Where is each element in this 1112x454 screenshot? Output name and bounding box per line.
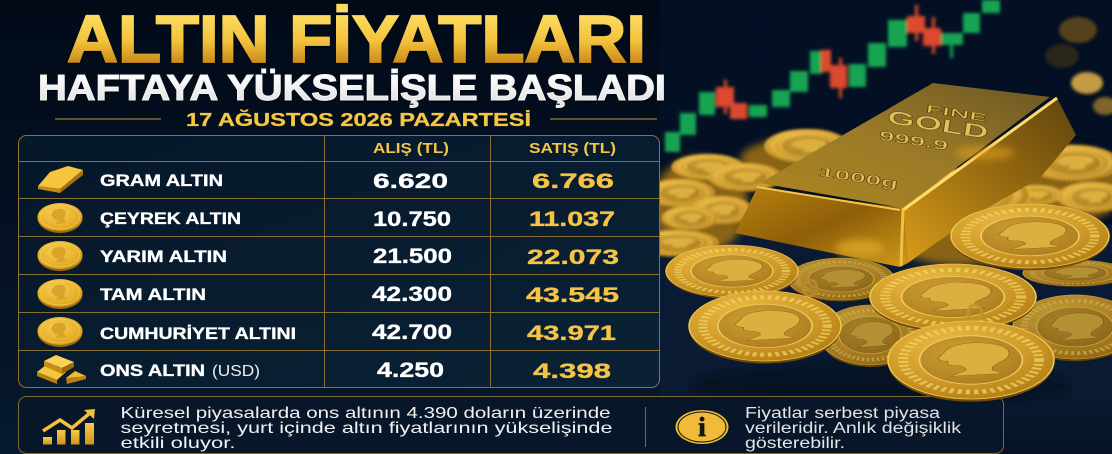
darker loose coins [788, 258, 1112, 367]
row: ons altın: (USD) [212, 363, 260, 380]
icon: front coin [888, 321, 1054, 402]
photo: gold bar and coins with rising chart [634, 0, 1112, 454]
bar engraving: 999.9 [878, 128, 949, 153]
row: cumhuriyet altını [38, 317, 616, 347]
text: market note [120, 405, 613, 452]
table header: SATIŞ (TL) [529, 140, 616, 157]
text: market note: Küresel piyasalarda ons altının 4.390 doların üzerinde [120, 405, 611, 422]
icon: gold bars stack [37, 355, 86, 384]
row: tam altın [38, 279, 619, 309]
row: çeyrek altın: 10.750 [373, 208, 451, 231]
table header [373, 140, 616, 157]
row: çeyrek altın [38, 203, 615, 233]
text: disclaimer [745, 405, 961, 452]
price table [18, 136, 660, 388]
icon: coin [38, 317, 82, 347]
golden mass under coins [652, 138, 1112, 265]
table header: ALIŞ (TL) [373, 140, 449, 157]
coins behind bar [634, 129, 1112, 257]
row: gram altın: 6.620 [373, 170, 448, 193]
row: yarım altın: YARIM ALTIN [100, 247, 227, 266]
row: yarım altın: 21.500 [373, 245, 452, 268]
row: ons altın: 4.398 [533, 360, 611, 383]
coin shadows [690, 363, 1070, 407]
row: ons altın: ONS ALTIN [100, 361, 205, 380]
gold bar [735, 83, 1076, 267]
bar engraving: FINE [925, 103, 988, 125]
row: tam altın: 43.545 [526, 284, 619, 307]
panel: market note and disclaimer [18, 396, 1004, 454]
bokeh lights [1045, 17, 1112, 115]
bar engraving: 1000g [818, 164, 899, 191]
date line: 17 AĞUSTOS 2026 PAZARTESİ [186, 109, 531, 130]
icon: coin [38, 203, 82, 233]
bar engraving [818, 103, 990, 191]
chart: blurred candlesticks [660, 0, 1112, 170]
row: çeyrek altın: 11.037 [529, 208, 615, 231]
row: cumhuriyet altını: 42.700 [372, 321, 452, 344]
row: yarım altın: 22.073 [527, 246, 619, 269]
text: disclaimer: verileridir. Anlık değişiklik [745, 420, 961, 437]
icon: coin [38, 241, 82, 271]
bar engraving: GOLD [886, 107, 990, 144]
text: disclaimer: Fiyatlar serbest piyasa [745, 405, 940, 422]
text: disclaimer: gösterebilir. [745, 435, 845, 452]
title: ALTIN FİYATLARI [67, 2, 646, 77]
icon: coin [38, 279, 82, 309]
row: tam altın: 42.300 [372, 283, 452, 306]
row: gram altın: GRAM ALTIN [100, 171, 223, 190]
icon: gold bar [38, 166, 83, 193]
row: gram altın [38, 166, 614, 193]
row: gram altın: 6.766 [532, 170, 614, 193]
icon: info: i [698, 412, 706, 442]
row: tam altın: TAM ALTIN [100, 285, 206, 304]
row: cumhuriyet altını: CUMHURİYET ALTINI [100, 324, 296, 343]
row: çeyrek altın: ÇEYREK ALTIN [100, 209, 241, 228]
text: market note: seyretmesi, yurt içinde altın fiyatlarının yükselişinde [120, 420, 613, 437]
foreground coins [666, 204, 1109, 363]
subtitle: HAFTAYA YÜKSELİŞLE BAŞLADI [38, 67, 666, 108]
icon: info [676, 410, 728, 444]
icon: rising bar chart [43, 409, 95, 444]
text: market note: etkili oluyor. [120, 435, 236, 452]
row: cumhuriyet altını: 43.971 [527, 322, 616, 345]
row: ons altın [37, 355, 611, 384]
row: yarım altın [38, 241, 619, 271]
row: ons altın: 4.250 [377, 359, 444, 382]
